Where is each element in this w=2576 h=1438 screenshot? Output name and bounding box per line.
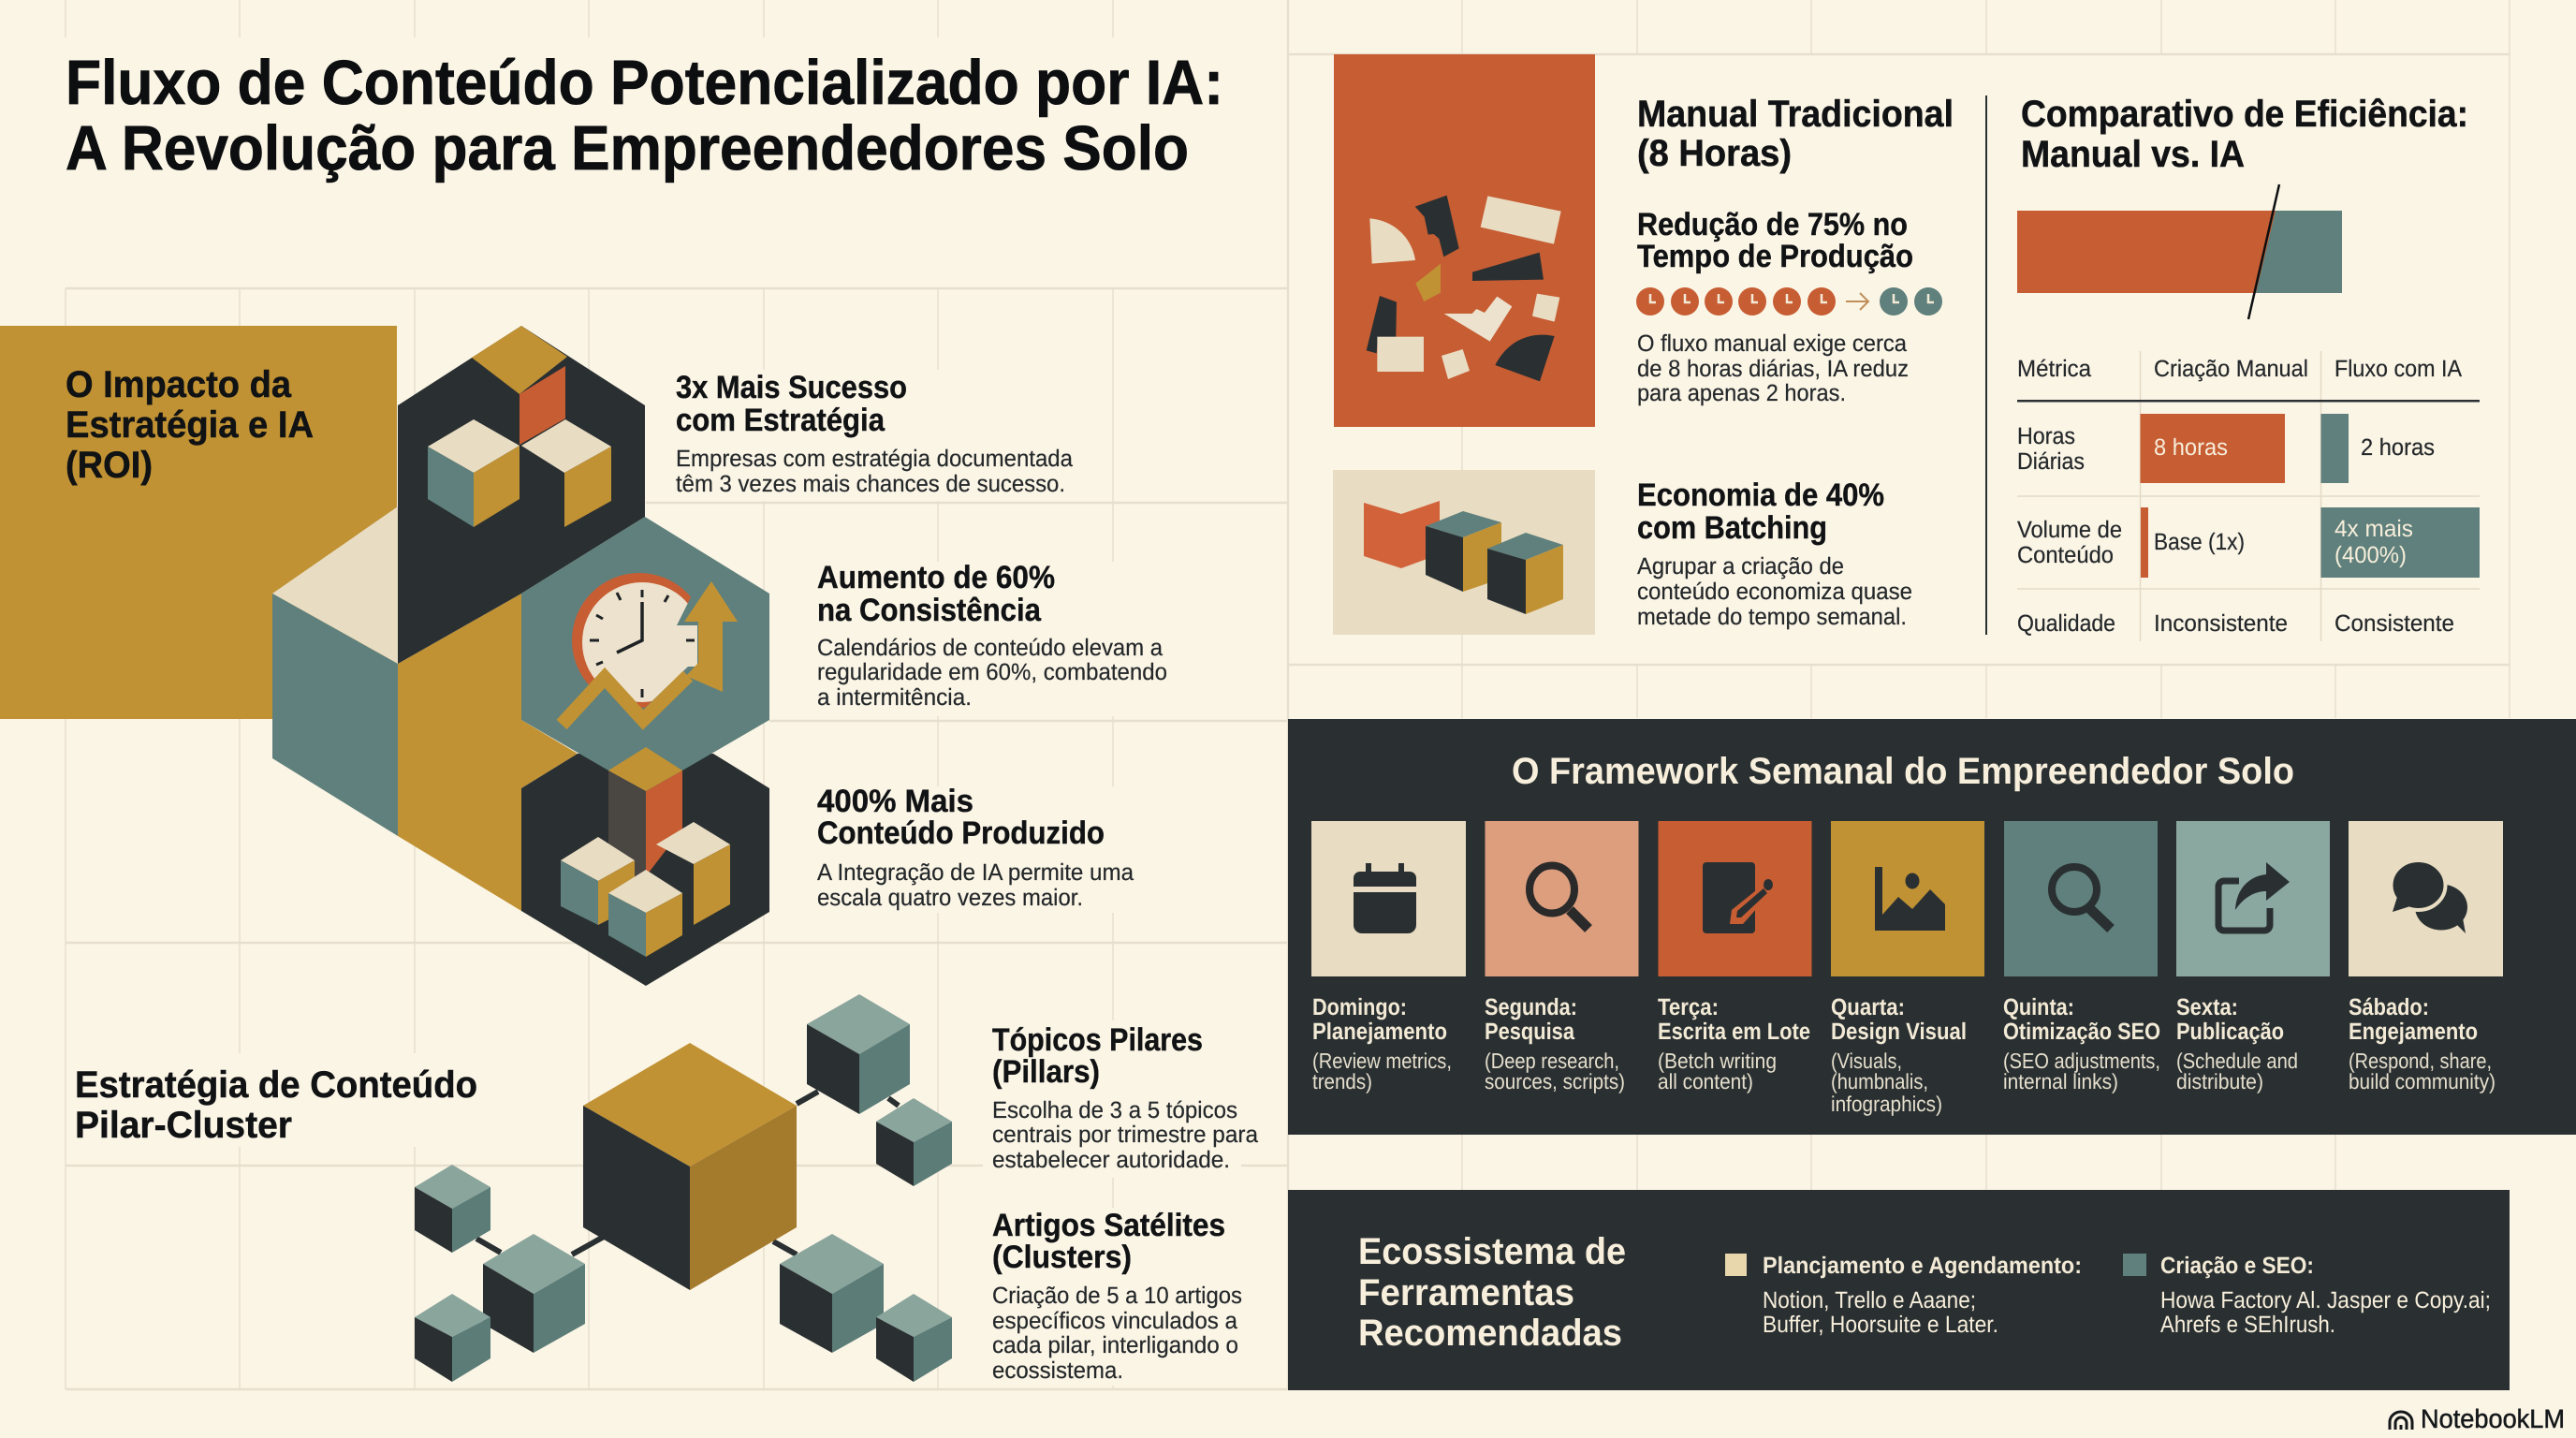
text: manual traditional: Manual Tradicional	[1637, 94, 1954, 135]
text: pillars: Escolha de 3 a 5 tópicos	[992, 1097, 1237, 1123]
panel: weekly framework	[1288, 719, 2576, 1135]
stat: 3x success: 3x Mais Sucesso	[676, 370, 907, 405]
card: Monday: Segunda:	[1485, 994, 1577, 1020]
title: A Revolução para Empreendedores Solo	[66, 113, 1189, 183]
heading: tools ecosystem	[1358, 1231, 1626, 1354]
text: 75% reduction	[1637, 207, 1913, 274]
panel: ROI heading block: Estratégia e IA	[66, 404, 314, 446]
card: Friday: (Schedule and	[2176, 1049, 2298, 1073]
text: manual description: para apenas 2 horas.	[1637, 380, 1846, 406]
card: Thursday: Quinta:	[2003, 994, 2074, 1020]
table: comparison metrics: 2 horas	[2361, 434, 2435, 461]
stat: 400% content: Conteúdo Produzido	[817, 815, 1105, 851]
heading: pillar-cluster: Estratégia de Conteúdo	[75, 1064, 477, 1106]
legend: creation and SEO	[2123, 1253, 2491, 1338]
heading: tools ecosystem: Recomendadas	[1358, 1313, 1622, 1354]
heading: tools ecosystem: Ecossistema de	[1358, 1231, 1626, 1272]
table: comparison metrics: Diárias	[2017, 448, 2085, 475]
card: Wednesday: (humbnalis,	[1831, 1069, 1928, 1093]
text: batching savings: metade do tempo semanal.	[1637, 604, 1907, 630]
card: Wednesday: Quarta:	[1831, 994, 1905, 1020]
panel: ROI heading block: (ROI)	[66, 445, 153, 486]
text: manual description: O fluxo manual exige cerca	[1637, 330, 1907, 357]
table: comparison metrics: Inconsistente	[2154, 610, 2288, 637]
card: Friday: Publicação	[2176, 1019, 2284, 1045]
card: Thursday	[2003, 821, 2160, 1093]
text: manual traditional	[1637, 94, 1954, 174]
stat: 60% consistency: regularidade em 60%, combatendo	[817, 659, 1167, 685]
card: Tuesday: (Betch writing	[1658, 1049, 1777, 1073]
stat: 60% consistency: a intermitência.	[817, 684, 972, 711]
table: comparison metrics: Qualidade	[2017, 610, 2115, 637]
icon row: clocks	[1636, 287, 1942, 315]
card: Monday: Pesquisa	[1485, 1019, 1575, 1045]
card: Saturday	[2349, 821, 2503, 1093]
card: Monday: sources, scripts)	[1485, 1069, 1625, 1093]
text: batching savings	[1637, 477, 1912, 630]
card: Sunday: (Review metrics,	[1312, 1049, 1452, 1073]
heading: efficiency comparison: Manual vs. IA	[2021, 134, 2245, 175]
legend: creation and SEO: Howa Factory Al. Jasper e Copy.ai;	[2160, 1287, 2491, 1313]
heading: weekly framework: O Framework Semanal do Empreendedor Solo	[1512, 751, 2294, 792]
legend: planning and scheduling: Notion, Trello e Aaane;	[1763, 1287, 1976, 1313]
heading: pillar-cluster	[75, 1064, 477, 1146]
text: pillars: centrais por trimestre para	[992, 1122, 1258, 1148]
stat: 3x success: têm 3 vezes mais chances de sucesso.	[676, 471, 1065, 497]
text: batching savings: Economia de 40%	[1637, 477, 1884, 513]
text: pillars: Tópicos Pilares	[992, 1022, 1203, 1058]
panel: fragmented manual workflow illustration	[1334, 54, 1595, 427]
panel: ROI heading block: O Impacto da	[66, 364, 292, 405]
card: Wednesday: (Visuals,	[1831, 1049, 1902, 1073]
card: Wednesday	[1831, 821, 1984, 1116]
card: Monday	[1485, 821, 1638, 1093]
card: Wednesday: Design Visual	[1831, 1019, 1967, 1045]
hexagon illustration: ROI	[272, 326, 769, 986]
title: Fluxo de Conteúdo Potencializado por IA:	[66, 48, 1223, 118]
text: clusters: (Clusters)	[992, 1240, 1132, 1275]
card: Saturday: (Respond, share,	[2349, 1049, 2492, 1073]
panel: tools ecosystem	[1288, 1190, 2510, 1390]
card: Saturday: Engejamento	[2349, 1019, 2478, 1045]
card: Friday	[2176, 821, 2330, 1093]
stat: 60% consistency: Aumento de 60%	[817, 560, 1055, 595]
legend: planning and scheduling	[1725, 1253, 2082, 1338]
text: clusters: cada pilar, interligando o	[992, 1332, 1238, 1358]
table: comparison metrics: Criação Manual	[2154, 356, 2308, 382]
text: pillars: estabelecer autoridade.	[992, 1147, 1230, 1173]
text: batching savings: conteúdo economiza quase	[1637, 579, 1912, 605]
card: Thursday: (SEO adjustments,	[2003, 1049, 2160, 1073]
chart: manual vs AI time bar	[2017, 184, 2342, 319]
text: pillars	[992, 1022, 1258, 1173]
legend: creation and SEO: Ahrefs e SEhIrush.	[2160, 1312, 2335, 1338]
table: comparison metrics: 8 horas	[2154, 434, 2228, 461]
stat: 3x success: com Estratégia	[676, 403, 886, 438]
legend: planning and scheduling: Plancjamento e Agendamento:	[1763, 1253, 2082, 1279]
stat: 60% consistency: Calendários de conteúdo elevam a	[817, 635, 1163, 661]
stat: 400% content	[817, 784, 1134, 911]
card: Friday: distribute)	[2176, 1069, 2263, 1093]
stat: 60% consistency: na Consistência	[817, 593, 1042, 628]
panel: ROI heading block	[0, 326, 397, 719]
card: Tuesday	[1658, 821, 1812, 1093]
stat: 60% consistency	[817, 560, 1167, 711]
card: Tuesday: Terça:	[1658, 994, 1719, 1020]
stat: 400% content: escala quatro vezes maior.	[817, 885, 1083, 911]
stat: 3x success	[676, 370, 1073, 497]
text: 75% reduction: Tempo de Produção	[1637, 239, 1913, 274]
text: 75% reduction: Redução de 75% no	[1637, 207, 1908, 242]
text: clusters: Criação de 5 a 10 artigos	[992, 1283, 1242, 1309]
card: Sunday: trends)	[1312, 1069, 1372, 1093]
heading: efficiency comparison: Comparativo de Eficiência:	[2021, 94, 2468, 135]
heading: pillar-cluster: Pilar-Cluster	[75, 1105, 292, 1146]
text: clusters: Artigos Satélites	[992, 1208, 1225, 1243]
text: pillars: (Pillars)	[992, 1054, 1100, 1090]
card: Saturday: Sábado:	[2349, 994, 2429, 1020]
stat: 3x success: Empresas com estratégia documentada	[676, 446, 1073, 472]
legend: creation and SEO: Criação e SEO:	[2160, 1253, 2314, 1279]
panel: batching illustration	[1333, 470, 1595, 635]
text: clusters: específicos vinculados a	[992, 1308, 1237, 1334]
table: comparison metrics	[2017, 351, 2480, 641]
stat: 400% content: 400% Mais	[817, 784, 973, 819]
card: Friday: Sexta:	[2176, 994, 2238, 1020]
table: comparison metrics: Horas	[2017, 423, 2075, 449]
card: Monday: (Deep research,	[1485, 1049, 1619, 1073]
card: Thursday: Otimização SEO	[2003, 1019, 2160, 1045]
table: comparison metrics: Fluxo com IA	[2334, 356, 2462, 382]
legend: planning and scheduling: Buffer, Hoorsuite e Later.	[1763, 1312, 1998, 1338]
stat: 400% content: A Integração de IA permite uma	[817, 859, 1134, 886]
card: Sunday: Planejamento	[1312, 1019, 1447, 1045]
diagram: pillar and cluster cubes	[415, 994, 952, 1382]
text: batching savings: Agrupar a criação de	[1637, 553, 1844, 580]
card: Tuesday: all content)	[1658, 1069, 1753, 1093]
text: manual description	[1637, 330, 1909, 406]
card: Wednesday: infographics)	[1831, 1092, 1942, 1116]
text: clusters	[992, 1208, 1242, 1384]
heading: efficiency comparison	[2021, 94, 2468, 175]
table: comparison metrics: 4x mais	[2334, 516, 2413, 542]
table: comparison metrics: Consistente	[2334, 610, 2454, 637]
table: comparison metrics: Base (1x)	[2154, 529, 2245, 555]
icon: clock and growth arrow	[562, 571, 749, 740]
card: Sunday	[1311, 821, 1466, 1093]
table: comparison metrics: Conteúdo	[2017, 542, 2114, 568]
text: manual traditional: (8 Horas)	[1637, 133, 1792, 174]
card: Saturday: build community)	[2349, 1069, 2496, 1093]
heading: tools ecosystem: Ferramentas	[1358, 1272, 1574, 1313]
card: Tuesday: Escrita em Lote	[1658, 1019, 1810, 1045]
table: comparison metrics: Volume de	[2017, 517, 2122, 543]
text: clusters: ecossistema.	[992, 1357, 1123, 1384]
text: batching savings: com Batching	[1637, 510, 1827, 546]
text: manual description: de 8 horas diárias, IA reduz	[1637, 356, 1909, 382]
logo: NotebookLM: NotebookLM	[2421, 1404, 2565, 1433]
card: Sunday: Domingo:	[1312, 994, 1407, 1020]
card: Thursday: internal links)	[2003, 1069, 2118, 1093]
table: comparison metrics: Métrica	[2017, 356, 2091, 382]
title	[66, 48, 1223, 183]
table: comparison metrics: (400%)	[2334, 542, 2407, 568]
